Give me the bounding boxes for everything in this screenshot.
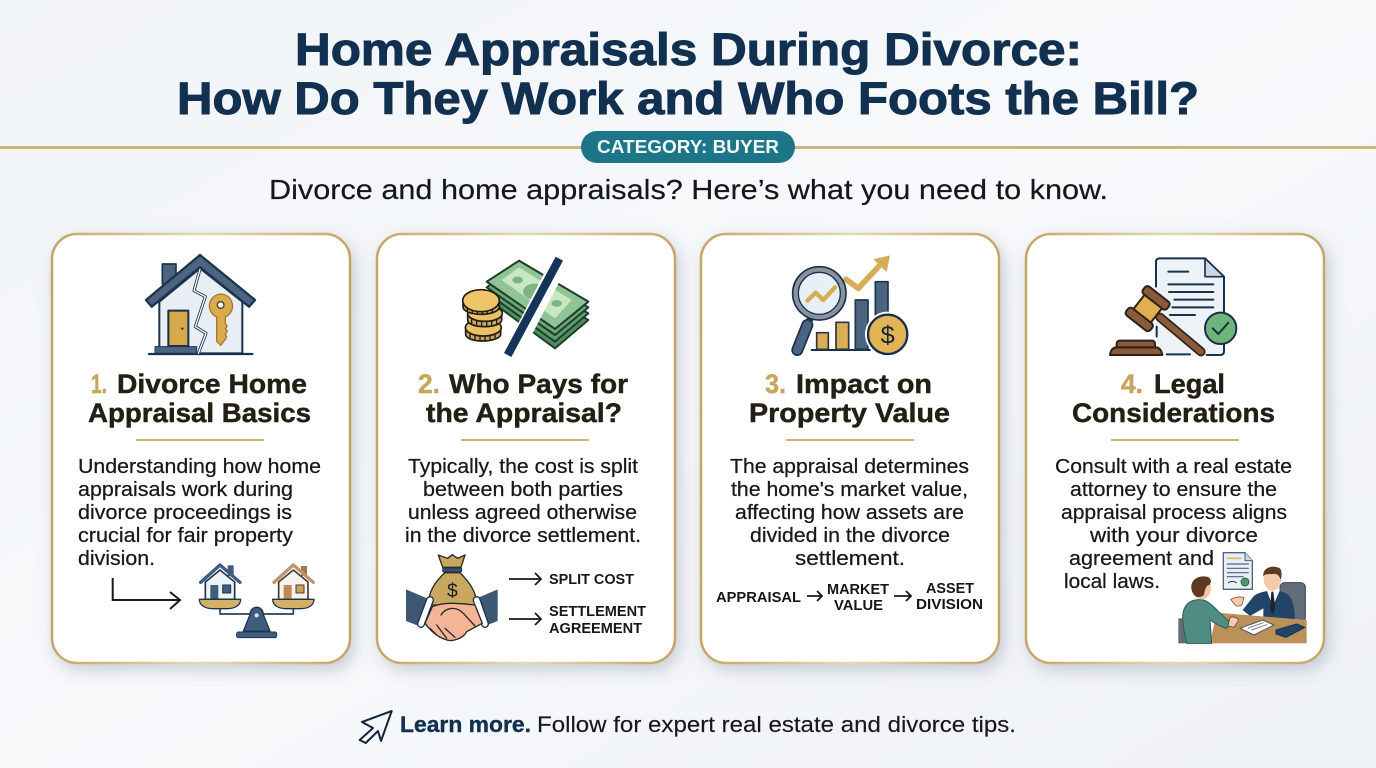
icon: magnifier, bar chart and dollar coin: $ bbox=[881, 321, 895, 349]
body text: The appraisal determines bbox=[730, 455, 969, 478]
heading bbox=[749, 369, 950, 428]
footer call to action: Follow for expert real estate and divorce tips. bbox=[537, 712, 1016, 737]
body text: divorce proceedings is bbox=[78, 501, 292, 524]
body text: crucial for fair property bbox=[78, 524, 294, 547]
flow: appraisal to market value to asset division: APPRAISAL bbox=[716, 590, 801, 606]
arrow: to settlement agreement bbox=[509, 613, 541, 625]
body text: division. bbox=[78, 547, 155, 570]
body text: attorney to ensure the bbox=[1070, 478, 1277, 501]
illustration: attorney consultation bbox=[1178, 553, 1307, 643]
icon: money bag and handshake: $ bbox=[447, 581, 458, 602]
icon: houses on balance scale bbox=[199, 565, 314, 638]
heading bbox=[88, 369, 311, 428]
body text bbox=[1055, 455, 1292, 593]
icon: split money and coins bbox=[463, 255, 588, 358]
arrow: elbow bbox=[113, 578, 180, 609]
label: split cost: SPLIT COST bbox=[549, 572, 634, 588]
panel: who pays for the appraisal bbox=[377, 234, 675, 663]
flow: appraisal to market value to asset division: DIVISION bbox=[916, 597, 983, 613]
body text bbox=[730, 455, 969, 570]
heading: 1. bbox=[91, 369, 107, 399]
title: How Do They Work and Who Foots the Bill? bbox=[177, 73, 1199, 124]
title: Home Appraisals During Divorce: bbox=[295, 24, 1082, 75]
body text: with your divorce bbox=[1089, 524, 1258, 547]
heading: Appraisal Basics bbox=[88, 398, 311, 428]
body text: agreement and bbox=[1069, 547, 1214, 570]
body text bbox=[405, 455, 641, 547]
icon: gavel and document with check bbox=[1110, 258, 1236, 355]
body text: Consult with a real estate bbox=[1055, 455, 1292, 478]
subtitle: Divorce and home appraisals? Here’s what you need to know. bbox=[269, 174, 1108, 205]
label: settlement agreement bbox=[549, 604, 646, 637]
heading: Considerations bbox=[1072, 398, 1275, 428]
label: settlement agreement: AGREEMENT bbox=[549, 621, 642, 637]
flow: appraisal to market value to asset division: VALUE bbox=[834, 598, 883, 614]
panel: divorce home appraisal basics bbox=[52, 234, 350, 663]
heading: Impact on bbox=[796, 369, 932, 399]
flow: appraisal to market value to asset division: MARKET bbox=[827, 582, 889, 598]
body text: divided in the divorce bbox=[750, 524, 950, 547]
body text: the home's market value, bbox=[731, 478, 968, 501]
heading: Property Value bbox=[749, 398, 950, 428]
label: settlement agreement: SETTLEMENT bbox=[549, 604, 646, 620]
body text bbox=[78, 455, 321, 570]
heading: Legal bbox=[1154, 369, 1225, 399]
heading bbox=[418, 369, 628, 428]
body text: between both parties bbox=[423, 478, 623, 501]
body text: affecting how assets are bbox=[735, 501, 964, 524]
arrow: to split cost bbox=[509, 573, 541, 585]
body text: unless agreed otherwise bbox=[408, 501, 637, 524]
body text: appraisals work during bbox=[78, 478, 293, 501]
footer call to action: Learn more. bbox=[400, 712, 531, 737]
icon: cursor arrow bbox=[360, 711, 392, 743]
category badge: CATEGORY: BUYER bbox=[597, 137, 779, 157]
category badge bbox=[581, 131, 795, 163]
heading: the Appraisal? bbox=[426, 398, 622, 428]
body text: settlement. bbox=[795, 547, 905, 570]
flow: appraisal to market value to asset division: ASSET bbox=[926, 581, 974, 597]
heading: 3. bbox=[765, 369, 786, 399]
heading: 2. bbox=[418, 369, 440, 399]
panel: legal considerations bbox=[1026, 234, 1324, 663]
icon: magnifier, bar chart and dollar coin bbox=[793, 255, 910, 357]
title bbox=[177, 24, 1199, 124]
flow: appraisal to market value to asset division bbox=[716, 581, 983, 614]
body text: in the divorce settlement. bbox=[405, 524, 641, 547]
icon: money bag and handshake bbox=[406, 555, 498, 640]
body text: local laws. bbox=[1064, 570, 1160, 593]
heading: Who Pays for bbox=[449, 369, 628, 399]
heading: 4. bbox=[1121, 369, 1143, 399]
heading: Divorce Home bbox=[117, 369, 307, 399]
panel: impact on property value bbox=[701, 234, 999, 663]
body text: appraisal process aligns bbox=[1061, 501, 1287, 524]
heading bbox=[1072, 369, 1275, 428]
body text: Understanding how home bbox=[78, 455, 321, 478]
body text: Typically, the cost is split bbox=[408, 455, 638, 478]
icon: split house with key bbox=[146, 255, 255, 354]
